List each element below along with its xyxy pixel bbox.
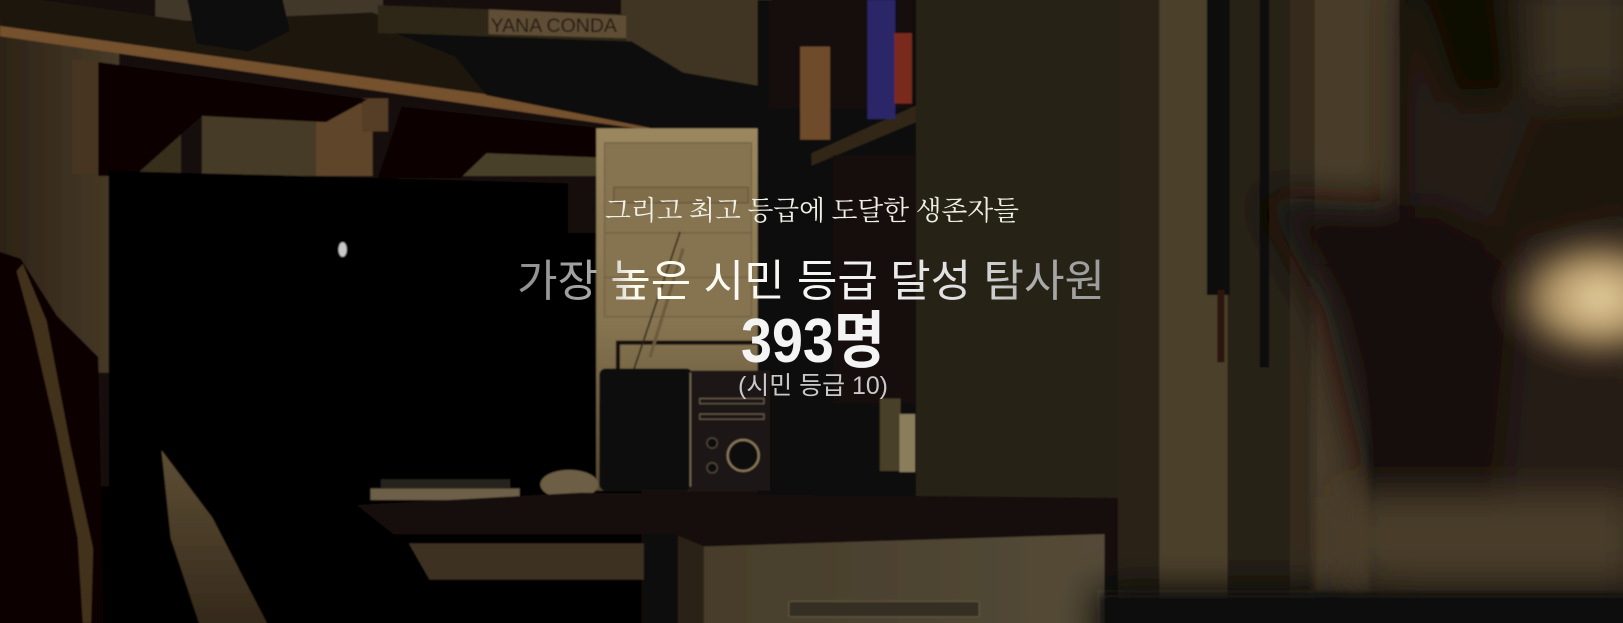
cabinet side (916, 0, 1118, 498)
small bottles (880, 399, 915, 472)
shelf top surface (0, 0, 662, 126)
blurred foreground figure (1097, 0, 1623, 623)
black shelf brackets (98, 62, 621, 178)
caption line: heading: 가장 높은 시민 등급 달성 탐사원 (517, 257, 1105, 306)
radio (599, 368, 770, 491)
blue can (867, 0, 895, 119)
book stack: YANA CONDA (491, 15, 618, 37)
black gap right of tower (758, 0, 916, 507)
caption number: 393: 393명 (741, 307, 885, 376)
shelf unit (768, 0, 916, 404)
book stack (378, 5, 626, 41)
keyboard (371, 479, 520, 500)
shelf front edge (0, 26, 650, 130)
hanging cables (1207, 0, 1269, 367)
radio antenna (633, 232, 683, 371)
left wall (0, 21, 119, 373)
caption block (517, 196, 1105, 400)
desk leg (644, 534, 677, 623)
curtain and door frame (1118, 0, 1399, 616)
back wall above shelf (155, 0, 771, 109)
mouse (540, 470, 598, 499)
PC tower (596, 128, 761, 491)
monitor highlight (338, 242, 347, 257)
shelf objects (186, 0, 776, 129)
lower black area (62, 486, 642, 623)
red can (894, 33, 912, 104)
drawer box (678, 534, 1104, 623)
dark floor band (1102, 595, 1623, 623)
under-desk shelf (409, 543, 644, 580)
monitor (109, 171, 600, 507)
wall panels under shelf (72, 60, 600, 176)
caption note: citizen grade: (시민 등급 10) (738, 372, 888, 400)
chair back (0, 248, 104, 623)
desk top (357, 493, 1110, 534)
light strip at bottom left (161, 450, 271, 623)
blurred light glow (1491, 224, 1623, 373)
caption line: intro: 그리고 최고 등급에 도달한 생존자들 (605, 196, 1019, 226)
